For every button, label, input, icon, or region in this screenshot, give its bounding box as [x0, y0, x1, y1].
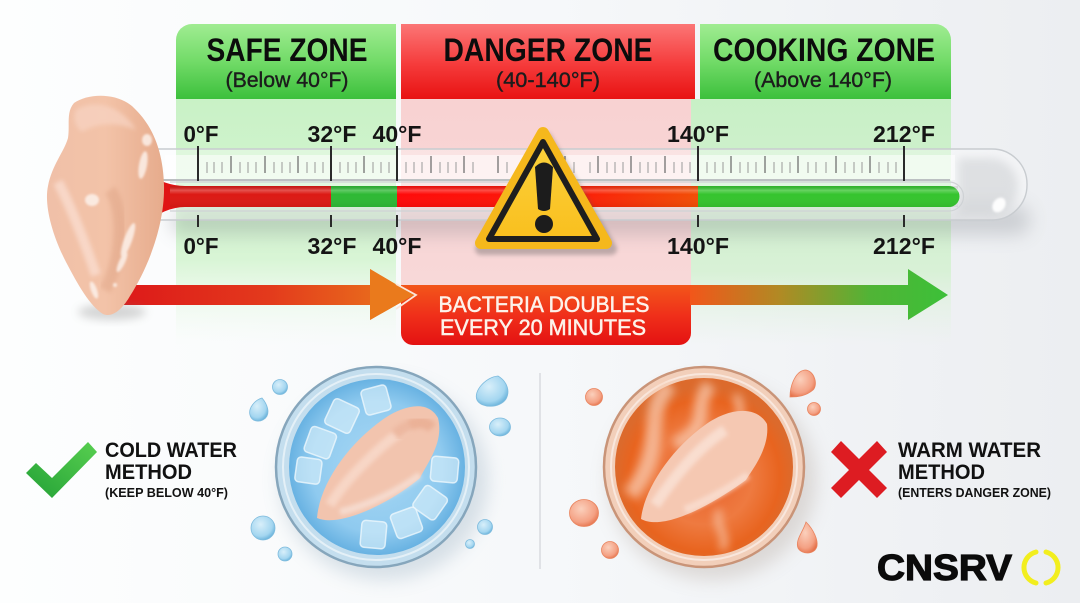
upper temperature labels: 40°F [372, 121, 422, 147]
upper temperature labels [184, 121, 935, 147]
upper temperature labels: 0°F [184, 121, 218, 147]
panel: cooking zone column [691, 24, 951, 345]
bacteria warning box: BACTERIA DOUBLES [438, 292, 650, 317]
warm droplets [570, 370, 820, 558]
lower temperature labels [184, 233, 935, 259]
warm water method label [898, 439, 1051, 500]
upper temperature labels: 140°F [667, 121, 729, 147]
cooking zone header: COOKING ZONE [713, 32, 935, 68]
icon: warning triangle [481, 133, 611, 249]
danger zone header: (40-140°F) [496, 69, 600, 92]
logo ring [1024, 552, 1058, 583]
icon: red cross [831, 441, 887, 498]
mercury column [145, 172, 963, 224]
glass tube [110, 149, 1027, 220]
chicken in warm water [641, 411, 767, 522]
CNSRV logo: CNSRV [877, 547, 1012, 588]
CNSRV logo [877, 547, 1058, 588]
arrow: orange to green [690, 269, 948, 320]
icon: frozen chicken breast [47, 96, 164, 320]
thermometer [110, 146, 1030, 235]
safe zone header [176, 24, 396, 99]
danger zone header: DANGER ZONE [444, 32, 652, 68]
icon: green check mark [26, 442, 97, 498]
warm water bowl [604, 367, 816, 580]
panel: danger zone column [401, 24, 695, 289]
cold water method label: COLD WATER [105, 439, 237, 462]
lower temperature labels: 140°F [667, 233, 729, 259]
panel: safe zone column [176, 24, 396, 345]
cold water method label [105, 439, 237, 500]
water droplets [250, 376, 510, 561]
arrow: red to orange [124, 269, 414, 320]
safe zone header: SAFE ZONE [206, 32, 368, 68]
divider line [540, 373, 541, 569]
safe zone header: (Below 40°F) [226, 69, 348, 92]
warm water method label: METHOD [898, 461, 985, 484]
steam wisps [630, 385, 745, 550]
lower temperature labels: 212°F [873, 233, 935, 259]
cold water bowl [276, 367, 488, 580]
cooking zone header: (Above 140°F) [754, 69, 892, 92]
lower temperature labels: 32°F [308, 233, 356, 259]
cold water method label: METHOD [105, 461, 192, 484]
scale ticks [198, 146, 904, 227]
bacteria warning box [370, 269, 691, 345]
chicken in cold water [317, 406, 439, 520]
cold water method label: (KEEP BELOW 40°F) [105, 485, 228, 500]
cooking zone header [700, 24, 951, 99]
danger zone header [401, 24, 695, 99]
lower temperature labels: 0°F [184, 233, 218, 259]
ice cubes [294, 384, 459, 549]
warm water method label: (ENTERS DANGER ZONE) [898, 485, 1051, 500]
warm water method label: WARM WATER [898, 439, 1041, 462]
bacteria warning box: EVERY 20 MINUTES [440, 315, 646, 340]
frost patches [85, 134, 152, 299]
upper temperature labels: 32°F [308, 121, 356, 147]
upper temperature labels: 212°F [873, 121, 935, 147]
lower temperature labels: 40°F [372, 233, 422, 259]
